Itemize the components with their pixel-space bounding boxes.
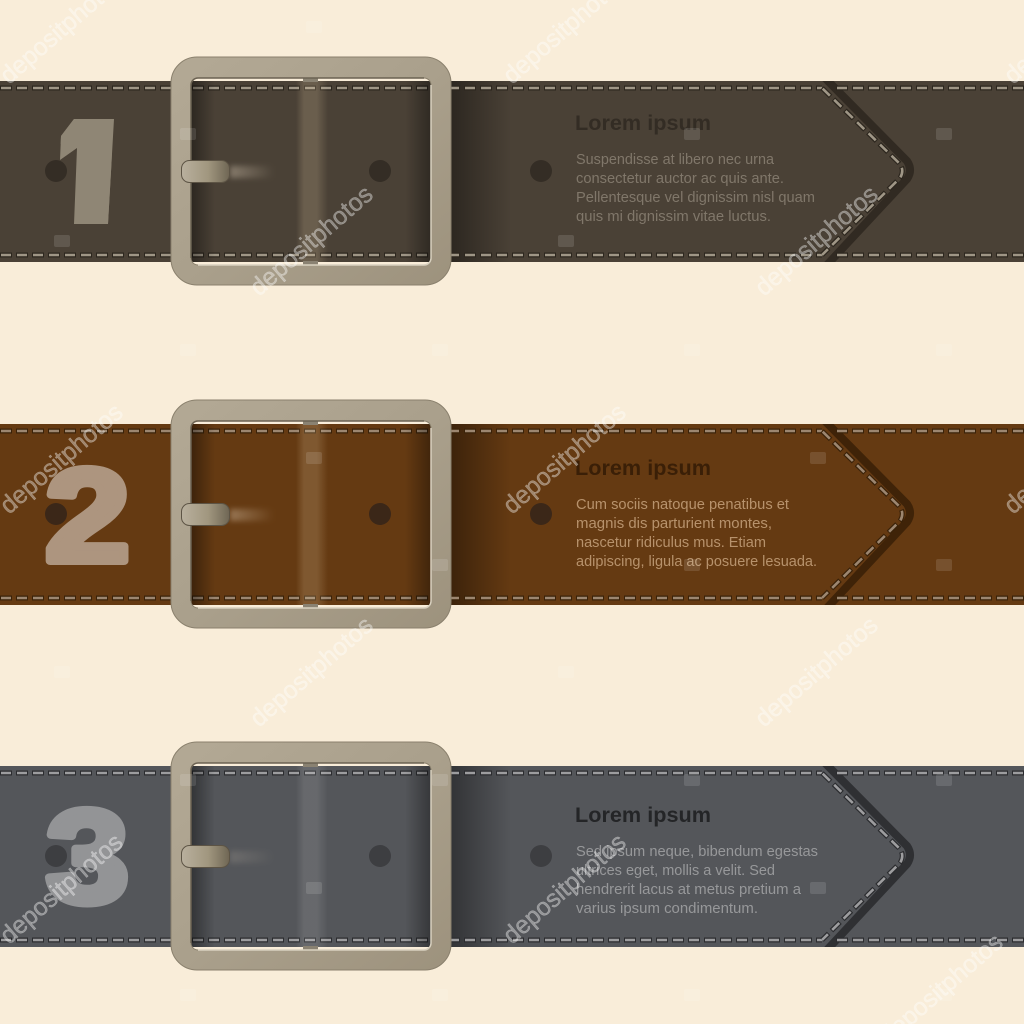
belt 3: [0, 742, 1024, 970]
belt 3 text: hendrerit lacus at metus pretium a: [576, 882, 802, 898]
buckle 3: [171, 742, 451, 970]
belt 1 arrow tip shadow: [824, 77, 910, 266]
belt 3 text: varius ipsum condimentum.: [576, 901, 758, 917]
belt 1 inner shading: [191, 81, 431, 262]
belt 3 edge shadow right of buckle: [451, 766, 511, 947]
belt 1 text: Suspendisse at libero nec urna: [576, 152, 775, 168]
belt 2 text: magnis dis parturient montes,: [576, 516, 772, 532]
belt 2 inner shading: [191, 424, 431, 605]
watermarks: depositphotos: [498, 398, 631, 520]
belt 3 text: Lorem ipsum: [575, 804, 711, 827]
belt 2 strap: [0, 424, 1024, 605]
belt 1 holes: [45, 160, 552, 182]
belt 3 stitching: [0, 773, 1024, 940]
watermarks: depositphotos: [750, 180, 883, 302]
belt 2 arrow tip shadow: [824, 420, 910, 609]
belt 1: [0, 57, 1024, 295]
belt 2 holes: [45, 503, 552, 525]
belt 1 text: quis mi dignissim vitae luctus.: [576, 209, 771, 225]
belt 3 text: Sed ipsum neque, bibendum egestas: [576, 844, 818, 860]
belt 3 text: [575, 804, 818, 917]
buckle 2: [171, 400, 451, 628]
number 2: 2: [45, 442, 130, 589]
belt 1 text: Pellentesque vel dignissim nisl quam: [576, 190, 815, 206]
belt 2 text: nascetur ridiculus mus. Etiam: [576, 535, 766, 551]
number 3: 3: [46, 783, 129, 930]
watermarks: depositphotos: [245, 611, 378, 733]
belt 3 arrow tip shadow: [824, 762, 910, 951]
watermarks: depositphotos: [750, 611, 883, 733]
number 1: 1: [34, 60, 151, 295]
belt 1 edge shadow right of buckle: [451, 81, 511, 262]
belt 2 text: Cum sociis natoque penatibus et: [576, 497, 789, 513]
watermarks: depositphotos: [498, 828, 631, 950]
belt 2 stitching: [0, 431, 1024, 598]
belt 2 text: adipiscing, ligula ac posuere lesuada.: [576, 554, 817, 570]
belt 2 text: Lorem ipsum: [575, 457, 711, 480]
belt 3 strap: [0, 766, 1024, 947]
belt 1 text: Lorem ipsum: [575, 112, 711, 135]
belt 3 text: ultrices eget, mollis a velit. Sed: [576, 863, 775, 879]
belt 1 strap: [0, 81, 1024, 262]
belt 2 edge shadow right of buckle: [451, 424, 511, 605]
belt 1 text: [575, 112, 815, 225]
belt 3 holes: [45, 845, 552, 867]
belt 2: [0, 400, 1024, 628]
belt 3 inner shading: [191, 766, 431, 947]
belt 1 text: consectetur auctor ac quis ante.: [576, 171, 784, 187]
belt 2 text: [575, 457, 817, 570]
watermarks: depositphotos: [245, 180, 378, 302]
belt 1 stitching: [0, 88, 1024, 255]
buckle 1: [171, 57, 451, 285]
